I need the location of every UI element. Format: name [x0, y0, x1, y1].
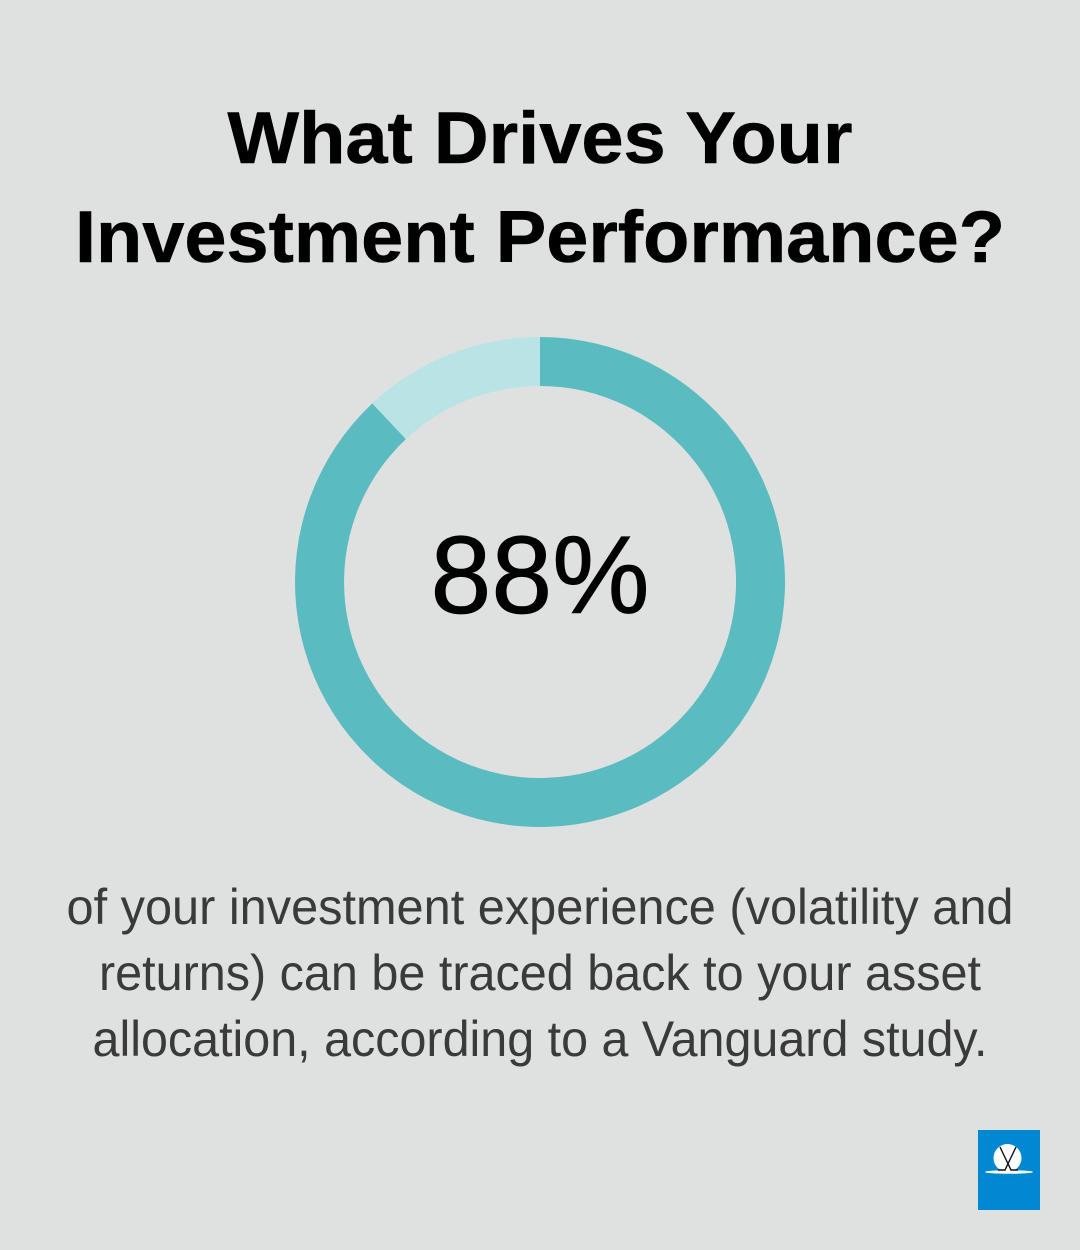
description text: of your investment experience (volatility and [66, 879, 1014, 935]
donut segment: remaining 12% [372, 337, 540, 439]
description text: allocation, according to a Vanguard study. [92, 1011, 988, 1067]
donut chart: 88% [295, 337, 785, 827]
description text [66, 879, 1014, 1067]
icon: logo badge with crossed hockey sticks [978, 1130, 1040, 1210]
title [75, 98, 1005, 278]
title: Investment Performance? [75, 197, 1005, 278]
big number: 88% [430, 514, 650, 637]
description text: returns) can be traced back to your asset [99, 945, 981, 1001]
title: What Drives Your [228, 98, 852, 179]
donut segment: 88% share [295, 337, 785, 827]
